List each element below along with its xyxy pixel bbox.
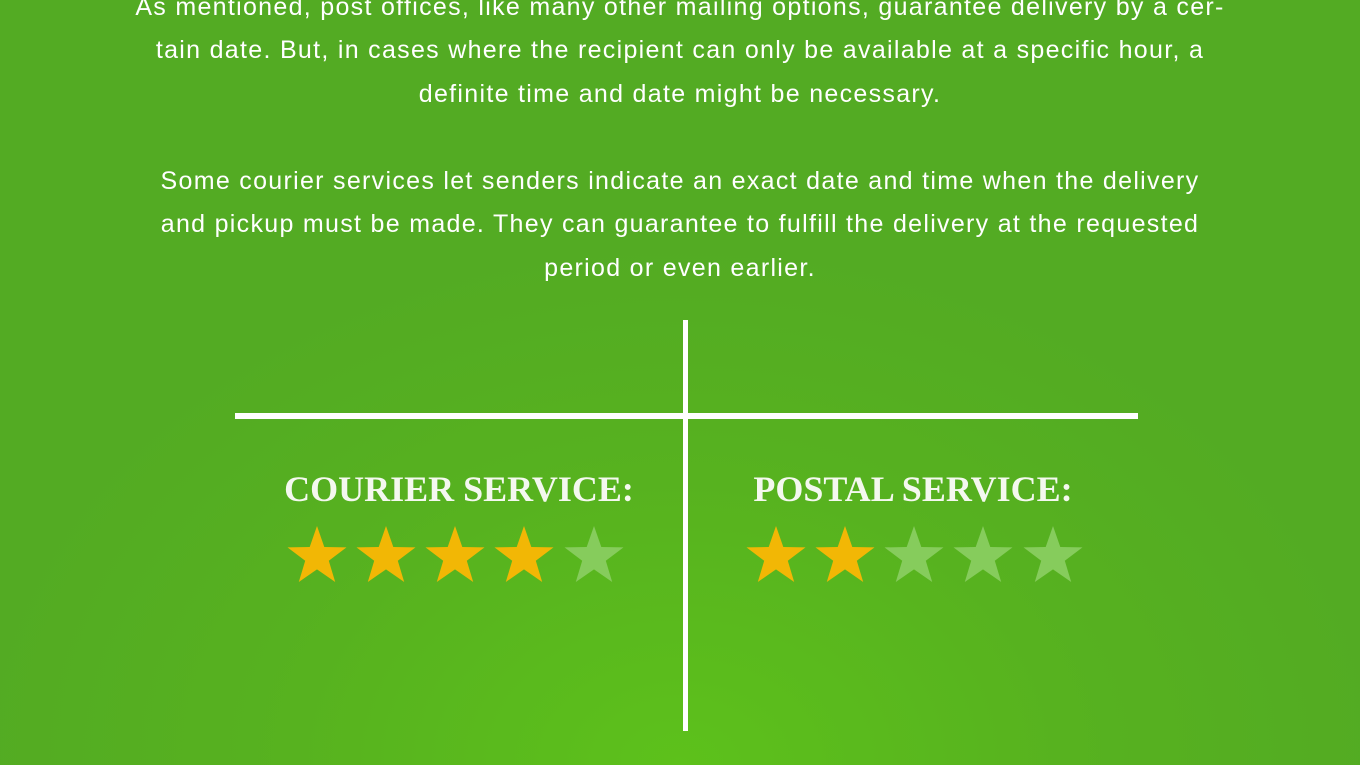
paragraph 2: period or even earlier. [544,254,816,282]
heading: courier service: COURIER SERVICE: [284,469,634,509]
paragraph 1 [135,0,1225,108]
horizontal divider line [235,413,1138,419]
paragraph 2 [161,167,1199,282]
paragraph 2: and pickup must be made. They can guarantee to fulfill the delivery at the requested [161,210,1199,238]
rating: postal 2 of 5 stars [746,526,1082,582]
paragraph 1: definite time and date might be necessary. [419,80,941,108]
rating: courier 4 of 5 stars [288,526,624,582]
paragraph 2: Some courier services let senders indicate an exact date and time when the delivery [161,167,1199,195]
paragraph 1: tain date. But, in cases where the recipient can only be available at a specific hour, a [156,36,1204,64]
heading: postal service: POSTAL SERVICE: [753,469,1073,509]
vertical divider line [683,320,688,731]
